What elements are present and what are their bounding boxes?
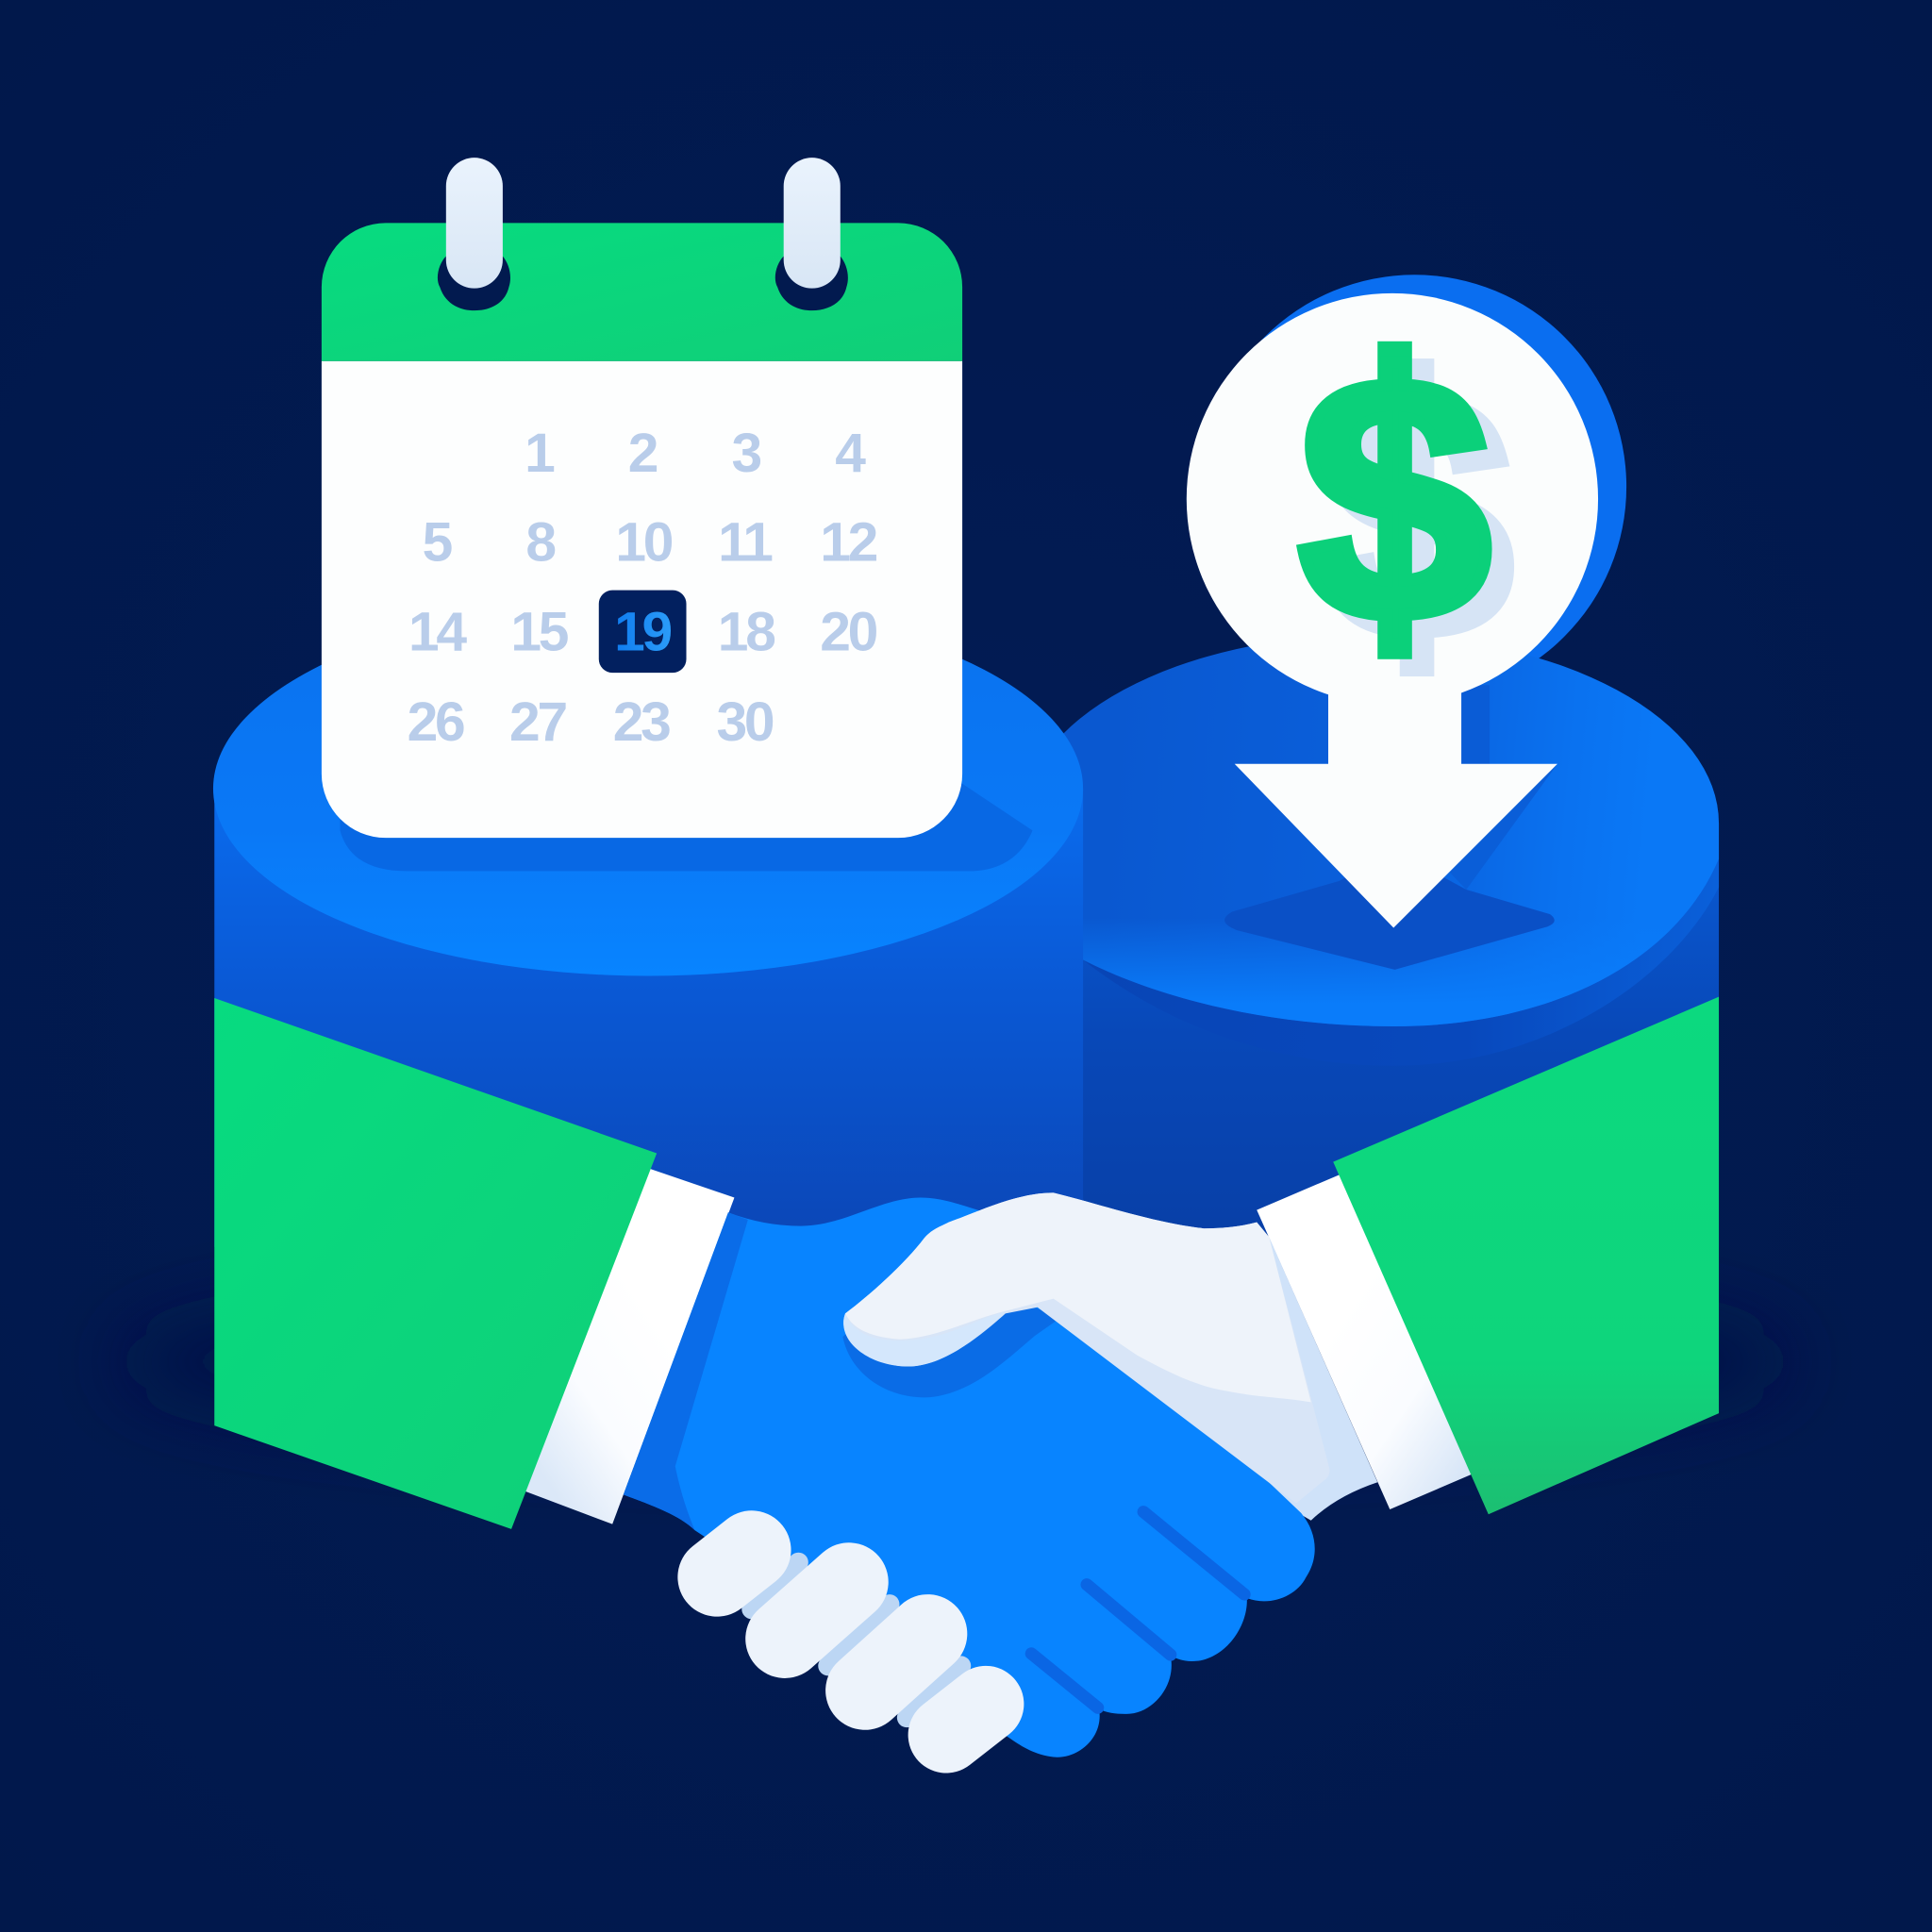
calendar numbers: 5 xyxy=(423,511,453,573)
binding rings xyxy=(446,158,841,289)
calendar numbers: 27 xyxy=(509,691,566,753)
gaps between white fingers xyxy=(752,1562,961,1718)
calendar numbers: 3 xyxy=(731,423,760,484)
left cylinder xyxy=(213,601,1083,1247)
blue hand cuff shade xyxy=(624,1212,748,1530)
dollar sign: $ xyxy=(1299,308,1491,692)
calendar numbers: 2 xyxy=(628,423,658,484)
calendar shadow xyxy=(340,784,1033,871)
right cylinder xyxy=(1022,635,1719,1248)
light underside of white hand xyxy=(1109,1237,1377,1521)
left shirt cuff xyxy=(518,1166,734,1524)
blue hand xyxy=(624,1198,1315,1757)
thumb shade xyxy=(843,1312,1006,1366)
coin face xyxy=(1187,293,1598,705)
right shirt cuff xyxy=(1257,1171,1485,1509)
calendar numbers: 4 xyxy=(835,423,866,484)
calendar xyxy=(322,158,962,838)
calendar numbers: 18 xyxy=(718,602,774,663)
binding holes xyxy=(438,257,848,310)
calendar numbers: 10 xyxy=(615,511,673,573)
arrow shadows xyxy=(1224,685,1557,970)
handshake xyxy=(624,1192,1377,1757)
shadow under thumb xyxy=(842,1293,1059,1397)
calendar numbers: 26 xyxy=(408,691,464,753)
calendar numbers: 23 xyxy=(613,691,670,753)
calendar numbers: 30 xyxy=(716,691,774,753)
white fingers xyxy=(717,1550,986,1735)
calendar numbers xyxy=(408,423,877,753)
calendar numbers: 15 xyxy=(510,602,569,663)
calendar numbers: 8 xyxy=(525,511,555,573)
right green sleeve xyxy=(1333,997,1719,1514)
left sleeve xyxy=(214,998,734,1529)
dollar sign shadow: $ xyxy=(1321,325,1513,709)
calendar numbers: 14 xyxy=(408,602,467,663)
calendar numbers: 12 xyxy=(820,511,877,573)
calendar numbers: 11 xyxy=(718,511,773,573)
calendar page xyxy=(322,361,962,838)
calendar header xyxy=(322,223,962,361)
ground shadow xyxy=(124,1269,1787,1454)
right sleeve xyxy=(1257,997,1719,1514)
arrow xyxy=(1235,665,1557,928)
white hand highlight xyxy=(845,1192,1311,1402)
highlighted date box xyxy=(599,591,687,673)
coin backing xyxy=(1203,275,1626,699)
calendar numbers: 1 xyxy=(525,423,555,484)
coin with down arrow xyxy=(1187,293,1598,928)
left green sleeve xyxy=(214,998,657,1529)
finger creases xyxy=(1031,1512,1244,1707)
white hand xyxy=(843,1192,1329,1503)
calendar numbers: 20 xyxy=(820,602,877,663)
calendar numbers: 19 xyxy=(614,602,671,663)
